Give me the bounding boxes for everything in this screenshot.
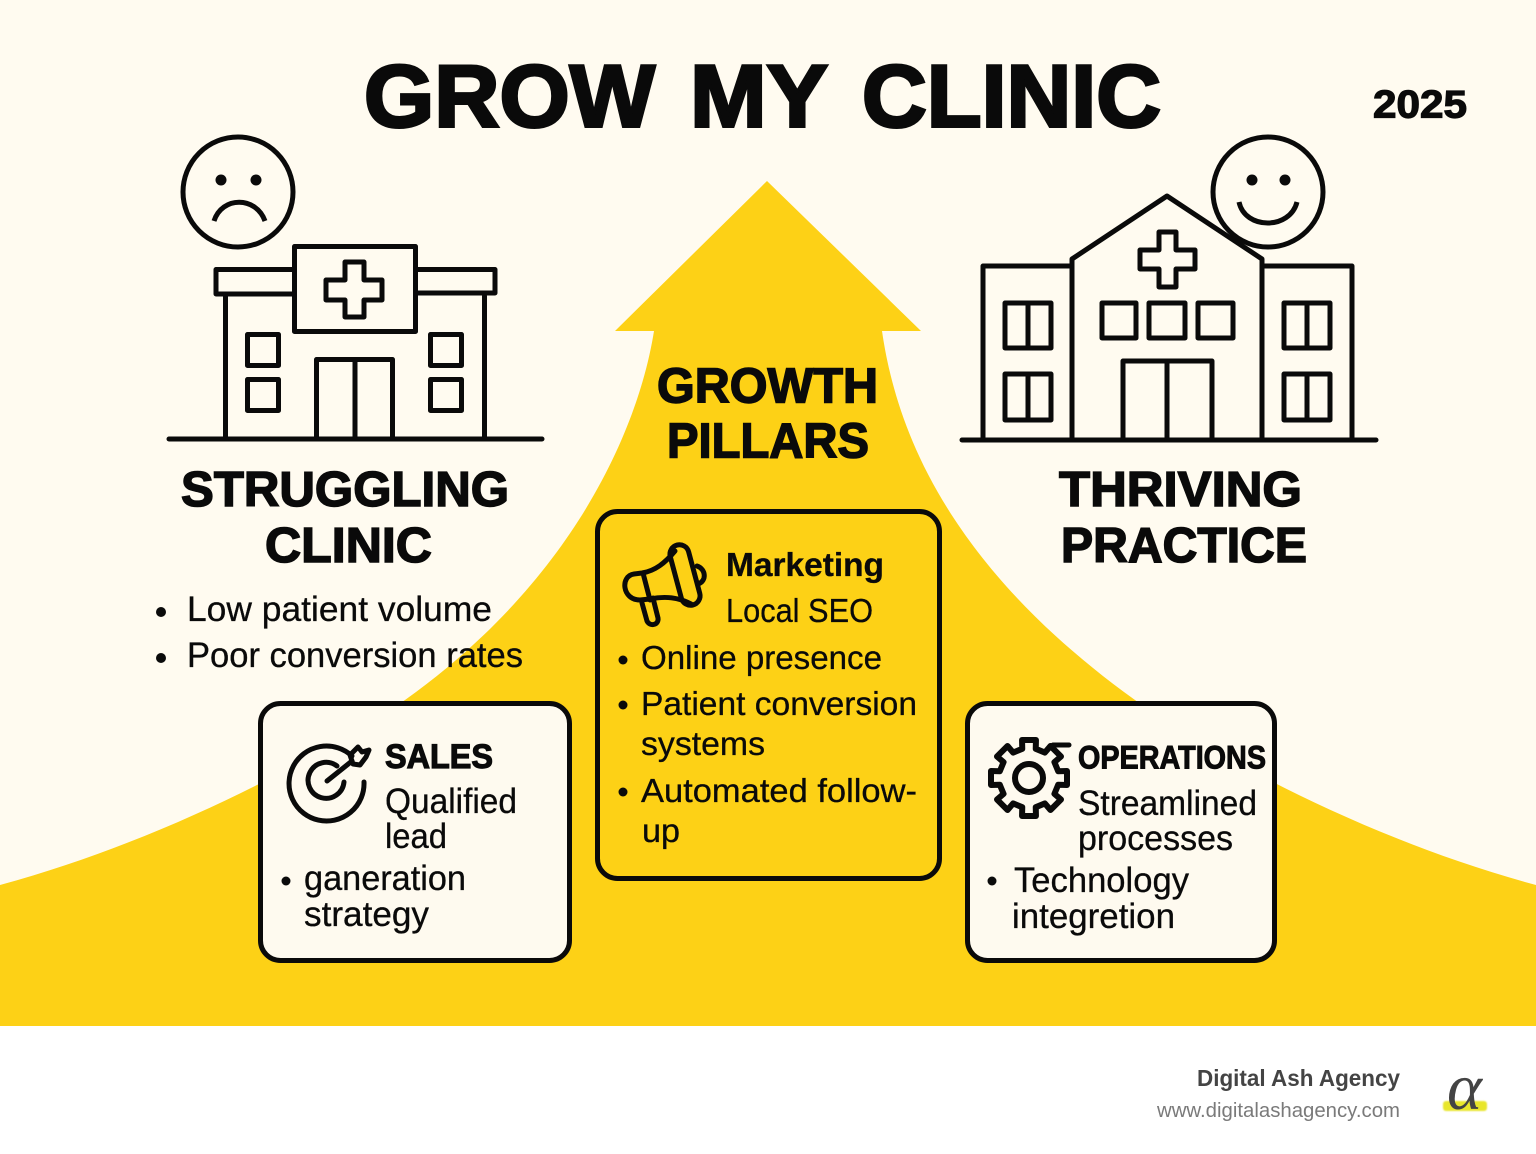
operations text <box>988 740 1266 936</box>
list: struggling clinic problems <box>156 590 523 675</box>
icon: struggling clinic building <box>169 246 542 439</box>
marketing text: Online presence <box>641 639 882 676</box>
footer: agency name and url: www.digitalashagency.com <box>1156 1099 1400 1122</box>
operations text: Streamlined <box>1078 784 1257 823</box>
marketing text: systems <box>641 725 765 762</box>
heading: growth pillars <box>657 360 878 468</box>
icon: megaphone <box>625 543 704 625</box>
footer: agency name and url <box>1156 1065 1400 1122</box>
footer: agency name and url: Digital Ash Agency <box>1197 1065 1400 1091</box>
heading: struggling clinic: STRUGGLING <box>181 463 509 517</box>
heading: struggling clinic: CLINIC <box>265 519 432 573</box>
marketing text: Local SEO <box>726 592 873 629</box>
title: CLINIC <box>862 46 1161 146</box>
heading: growth pillars: PILLARS <box>667 414 869 468</box>
heading: struggling clinic <box>181 463 509 573</box>
icon: gear <box>991 740 1069 816</box>
icon: agency logo: α <box>1447 1051 1483 1124</box>
heading: thriving practice <box>1059 463 1307 573</box>
icon: target with dart <box>289 746 369 821</box>
heading: thriving practice: THRIVING <box>1059 463 1302 517</box>
icon: happy face <box>1213 137 1323 247</box>
panel: operations <box>968 704 1274 960</box>
growth arrow <box>0 181 1536 1026</box>
sales text: SALES <box>385 738 493 776</box>
marketing text: Patient conversion <box>641 685 917 722</box>
panel: marketing <box>598 512 940 878</box>
sales text: strategy <box>304 895 430 934</box>
heading: growth pillars: GROWTH <box>657 360 878 414</box>
sales text: Qualified <box>385 782 517 821</box>
panel: sales <box>260 704 570 960</box>
operations text: integretion <box>1012 897 1175 936</box>
marketing text: Automated follow- <box>641 772 917 809</box>
sales text: lead <box>385 817 447 856</box>
marketing text: Marketing <box>726 546 884 583</box>
operations text: Technology <box>1014 861 1189 900</box>
title <box>364 46 1161 146</box>
year: 2025 <box>1373 83 1467 126</box>
title: MY <box>690 46 828 146</box>
operations text: processes <box>1078 819 1233 858</box>
marketing text: up <box>642 812 680 849</box>
icon: thriving practice building <box>962 196 1376 440</box>
list: struggling clinic problems: Low patient volume <box>187 590 492 629</box>
list: struggling clinic problems: Poor conversion rates <box>187 636 523 675</box>
title: GROW <box>364 46 655 146</box>
icon: sad face <box>183 137 293 247</box>
sales text: ganeration <box>304 859 466 898</box>
operations text: OPERATIONS <box>1078 740 1266 776</box>
marketing text <box>618 546 917 849</box>
sales text <box>282 738 517 934</box>
heading: thriving practice: PRACTICE <box>1061 519 1307 573</box>
